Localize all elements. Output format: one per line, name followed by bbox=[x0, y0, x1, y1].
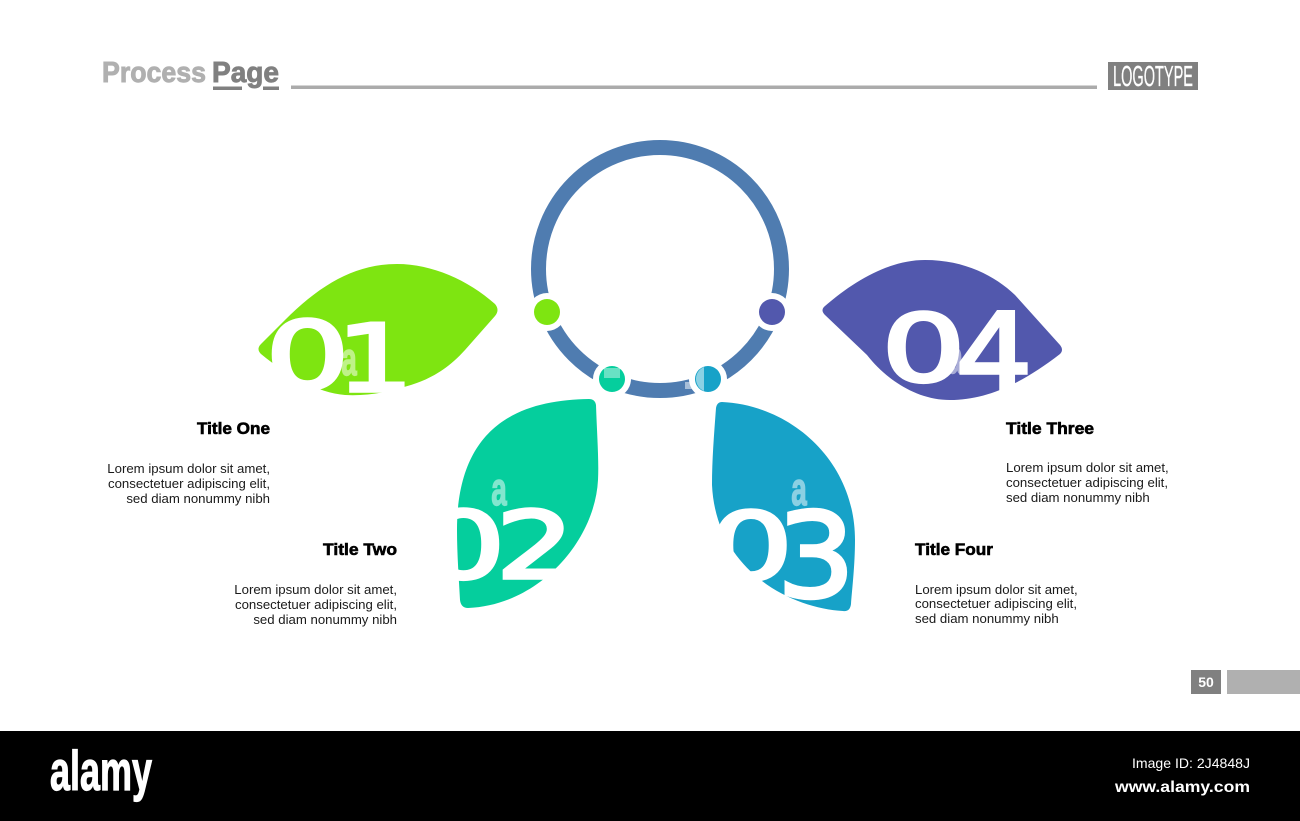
text block: Title Three bbox=[1006, 420, 1169, 505]
text block: Title Two: Title Two bbox=[323, 541, 397, 559]
text block: Title Two: Lorem ipsum dolor sit amet, bbox=[234, 582, 397, 597]
text block: Title Four: Title Four bbox=[915, 541, 994, 559]
text block: Title Four: sed diam nonummy nibh bbox=[915, 611, 1059, 626]
dot: teal bbox=[593, 360, 631, 398]
text block: Title Three: sed diam nonummy nibh bbox=[1006, 490, 1150, 505]
leaf 02: a bbox=[491, 465, 507, 516]
text block: Title Four bbox=[915, 541, 1078, 626]
text block: Title Two: sed diam nonummy nibh bbox=[253, 612, 397, 627]
leaf 02: 0 bbox=[421, 492, 506, 600]
heading: Process Page bbox=[102, 57, 279, 90]
leaf 03: 3 bbox=[777, 488, 855, 625]
text block: Title One bbox=[107, 420, 270, 506]
text block: Title One: consectetuer adipiscing elit, bbox=[108, 476, 270, 491]
leaf 04: 4 bbox=[956, 291, 1032, 419]
leaf 02: 2 bbox=[496, 492, 574, 600]
text block: Title Three: Title Three bbox=[1006, 420, 1094, 438]
footer band: Image ID: 2J4848J bbox=[1132, 755, 1250, 771]
leaf 04 bbox=[822, 260, 1062, 419]
footer band: www.alamy.com bbox=[1114, 779, 1250, 796]
heading: Process Page: Process bbox=[102, 57, 206, 89]
text block: Title Three: Lorem ipsum dolor sit amet, bbox=[1006, 460, 1169, 475]
footer band bbox=[0, 731, 1300, 821]
leaf 03: a bbox=[791, 465, 807, 516]
text block: Title Two bbox=[234, 541, 397, 627]
leaf 03 bbox=[709, 402, 855, 625]
dot: purple bbox=[753, 293, 791, 331]
text block: Title Four: Lorem ipsum dolor sit amet, bbox=[915, 582, 1078, 597]
text block: Title One: Lorem ipsum dolor sit amet, bbox=[107, 461, 270, 476]
dot: blue bbox=[689, 360, 727, 398]
leaf 04: a bbox=[947, 333, 963, 384]
leaf 01: a bbox=[341, 335, 357, 386]
dot: green bbox=[528, 293, 566, 331]
ring with connector dots bbox=[528, 148, 791, 398]
page number: 50 bbox=[1198, 674, 1214, 690]
logotype box: LOGOTYPE bbox=[1113, 61, 1193, 93]
logotype box bbox=[1108, 61, 1198, 93]
heading: Process Page: Page bbox=[212, 57, 279, 89]
leaf 04: 0 bbox=[881, 295, 966, 403]
leaf 01: 1 bbox=[337, 306, 413, 413]
text block: Title Three: consectetuer adipiscing elit, bbox=[1006, 475, 1168, 490]
text block: Title Four: consectetuer adipiscing elit, bbox=[915, 596, 1077, 611]
footer band: alamy bbox=[50, 739, 152, 802]
leaf 02 bbox=[421, 399, 598, 608]
page number bbox=[1191, 670, 1300, 694]
leaf 01: 0 bbox=[265, 302, 350, 410]
leaf 03: 0 bbox=[709, 493, 793, 601]
text block: Title One: Title One bbox=[197, 420, 270, 438]
header bbox=[102, 57, 1198, 93]
leaf 01 bbox=[258, 264, 498, 413]
text block: Title One: sed diam nonummy nibh bbox=[126, 491, 270, 506]
text block: Title Two: consectetuer adipiscing elit, bbox=[235, 597, 397, 612]
